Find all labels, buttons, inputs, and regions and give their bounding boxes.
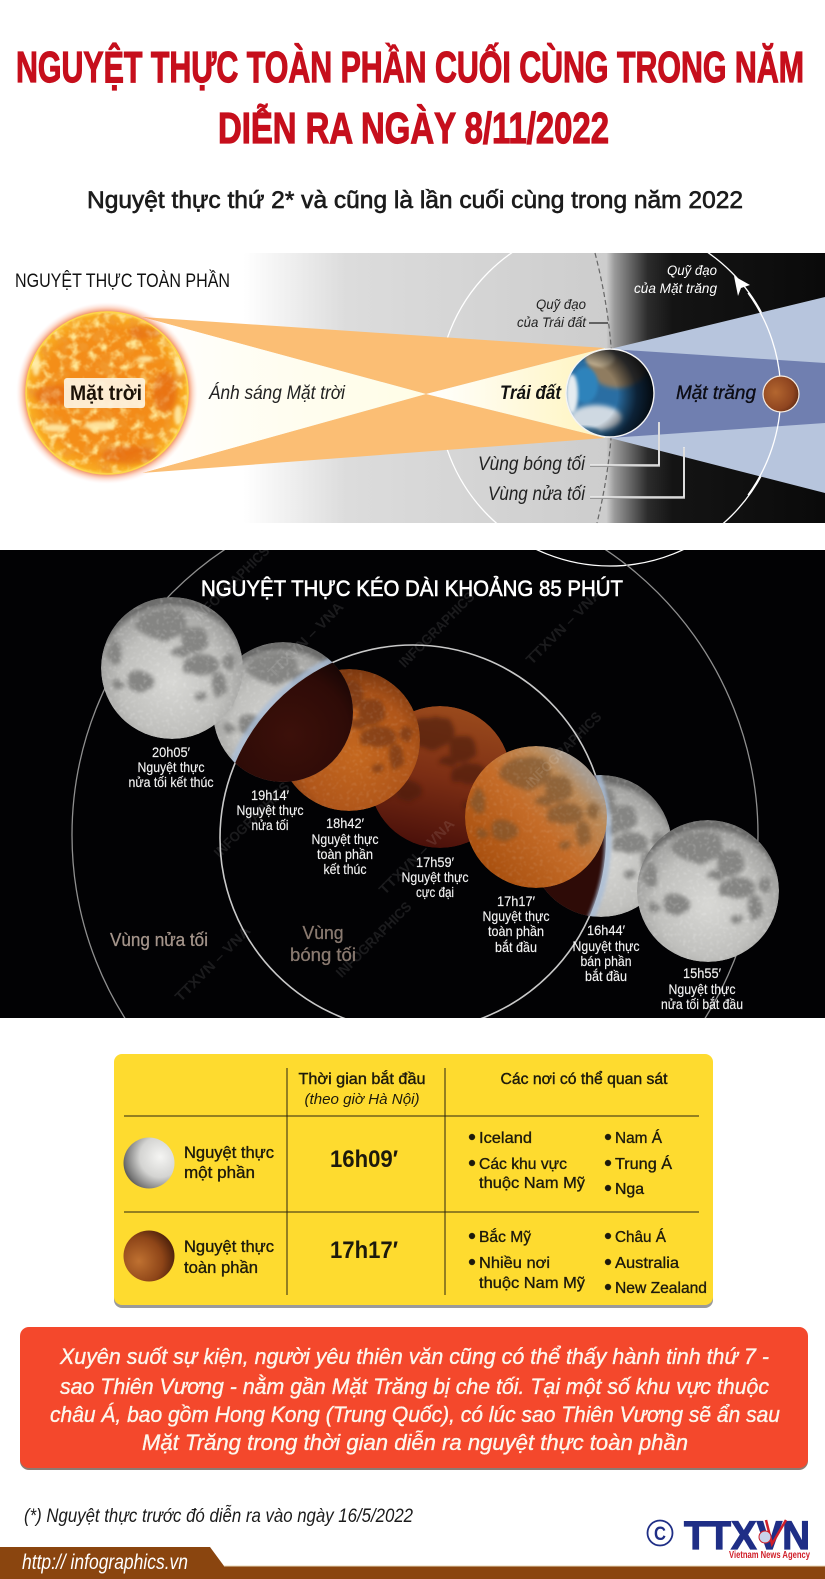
label: 19h14 [236,787,304,833]
table rules [124,1068,699,1295]
label: 15h55: 15h55′ [683,965,721,981]
callout: Uranus note: châu Á, bao gồm Hong Kong (Trung Quốc), có lúc sao Thiên Vương sẽ ẩn sau [50,1402,780,1427]
moon orbit over the shadow [748,293,781,495]
moon: 16h44 partial [544,775,670,917]
label: 17h17 [482,893,550,955]
sunlight rays [142,317,605,473]
moon: 20h05 [101,597,243,739]
icon: moon in shadow [763,376,799,412]
label: 17h59: 17h59′ [416,854,454,870]
label: umbra with leader: Vùng bóng tối [478,454,586,475]
label: 20h05 [128,744,214,790]
label: 17h17: 17h17′ [497,893,535,909]
label: penumbra with leader: Vùng nửa tối [488,484,586,505]
moon orbit arc [536,550,684,567]
earth orbit [595,253,613,523]
heading: total lunar eclipse: NGUYỆT THỰC TOÀN PHẦN [15,270,230,292]
label: 18h42 [312,815,378,877]
label: 18h42: kết thúc [324,861,366,877]
panel: eclipse timeline [0,550,825,1018]
table header: start time: (theo giờ Hà Nội) [304,1091,420,1108]
watermarks: INFOGRAPHICS [210,778,292,860]
moon: 17h59 maximum [369,706,511,848]
title [16,41,804,153]
locations: thuộc Nam Mỹ [479,1175,585,1192]
row label [184,1144,274,1182]
label: 17h59: Nguyệt thực [402,869,468,885]
moon orbit [438,253,762,523]
row label: một phần [184,1164,255,1182]
inner umbra circle [220,645,606,1031]
locations: Bắc Mỹ [479,1227,531,1246]
moon: 17h17 [465,746,607,888]
watermarks: INFOGRAPHICS [190,542,272,624]
label: moon orbit [634,262,717,296]
label: 17h59 [402,854,468,900]
icon: red moon [124,1230,174,1282]
table card [114,1056,713,1308]
watermarks [171,542,604,1004]
label: 18h42: 18h42′ [326,815,364,831]
diagram background [0,253,825,523]
row label [184,1238,274,1277]
locations [469,1128,672,1198]
label: 16h44: bắt đầu [585,968,627,984]
callout: Uranus note: Xuyên suốt sự kiện, người yêu thiên văn cũng có thể thấy hành tinh thứ 7 - [59,1344,769,1369]
panel: eclipse geometry diagram [16,252,825,524]
label: 19h14: 19h14′ [251,787,289,803]
label: 15h55 [661,965,743,1012]
label: umbra zone: bóng tối [290,945,356,965]
watermarks: TTXVN – VNA [171,922,253,1004]
logo: TTXVN: TTXVN [684,1514,810,1558]
label: penumbra with leader [488,447,684,505]
label: earth orbit [517,296,608,330]
heading: duration: NGUYỆT THỰC KÉO DÀI KHOẢNG 85 PHÚT [201,576,623,601]
locations: Nam Á [615,1128,662,1147]
outer penumbra circle [71,550,759,1018]
label: 18h42: Nguyệt thực [312,831,378,847]
label: 20h05: Nguyệt thực [138,759,204,775]
icon: grey moon [124,1138,174,1188]
row label: Nguyệt thực [184,1144,274,1162]
label: moon: Mặt trăng [676,383,756,404]
watermarks: TTXVN – VNA [264,598,346,680]
label: 17h59: cực đại [416,884,454,900]
row: partial eclipse [124,1128,672,1198]
moon: 15h55 [637,820,779,962]
watermarks: TTXVN – VNA [522,585,604,667]
label: 20h05: nửa tối kết thúc [128,774,214,790]
locations: Nga [615,1181,644,1198]
panel background [0,550,825,1018]
table header: start time [298,1071,426,1108]
row label: toàn phần [184,1259,258,1277]
label: 15h55: nửa tối bắt đầu [661,996,743,1012]
label: earth orbit: của Trái đất [517,314,587,330]
footer url: http:// infographics.vn [22,1551,188,1574]
locations: Các khu vực [479,1156,567,1173]
label: umbra zone [290,923,356,965]
label: 17h17: bắt đầu [495,939,537,955]
locations: Châu Á [615,1227,666,1246]
label: 16h44 [572,922,640,984]
locations: Nhiều nơi [479,1255,550,1272]
label: umbra zone: Vùng [302,923,344,943]
locations: Iceland [479,1130,532,1147]
row label: Nguyệt thực [184,1238,274,1256]
watermarks: INFOGRAPHICS [395,588,477,670]
label: 19h14: nửa tối [252,817,288,833]
label: 19h14: Nguyệt thực [236,802,304,818]
moon: 19h14 penumbral end with shadow [214,642,353,782]
label: 16h44: bán phần [580,953,632,969]
panel: observation table [114,1054,713,1308]
label: sun [64,378,145,408]
arrow: moon orbit direction [734,276,750,296]
label: 17h17: toàn phần [488,923,544,939]
label: 17h17: Nguyệt thực [482,908,550,924]
locations: Trung Á [615,1154,672,1173]
label: moon orbit: của Mặt trăng [634,280,717,296]
locations [469,1227,707,1297]
label: 16h44: Nguyệt thực [572,938,640,954]
table header: locations: Các nơi có thể quan sát [500,1071,668,1088]
watermarks: INFOGRAPHICS [522,708,604,790]
locations: Australia [615,1255,679,1272]
title: DIỄN RA NGÀY 8/11/2022 [218,103,609,153]
locations: New Zealand [615,1280,707,1297]
label: 18h42: toàn phần [317,846,373,862]
label: umbra with leader [478,422,659,475]
table header: start time: Thời gian bắt đầu [298,1071,426,1088]
label: 20h05: 20h05′ [152,744,190,760]
label: moon orbit: Quỹ đạo [667,262,717,278]
callout: Uranus note: Mặt Trăng trong thời gian diễn ra nguyệt thực toàn phần [142,1430,688,1455]
footnote: (*) Nguyệt thực trước đó diễn ra vào ngày 16/5/2022 [24,1506,413,1527]
start time: 17h17′ [330,1237,398,1264]
icon: earth [564,344,656,439]
label: 16h44: 16h44′ [587,922,625,938]
callout: Uranus note [20,1327,808,1470]
umbra [610,349,825,438]
label: 15h55: Nguyệt thực [668,981,736,997]
logo: TTXVN: C [654,1524,666,1545]
penumbra [610,297,825,493]
start time: 16h09′ [330,1146,398,1173]
footer band [0,1547,825,1579]
row: total eclipse [124,1227,707,1297]
label: earth orbit: Quỹ đạo [536,296,586,312]
moon: 18h42 [278,669,420,811]
subtitle: Nguyệt thực thứ 2* và cũng là lần cuối cùng trong năm 2022 [87,187,743,214]
callout: Uranus note: sao Thiên Vương - nằm gần Mặt Trăng bị che tối. Tại một số khu vực thuộc [60,1374,769,1399]
label: sun: Mặt trời [70,382,142,405]
watermarks: INFOGRAPHICS [332,898,414,980]
label: penumbra zone: Vùng nửa tối [110,930,208,950]
watermarks: TTXVN – VNA [375,815,457,897]
label: sunlight: Ánh sáng Mặt trời [208,383,346,404]
locations: thuộc Nam Mỹ [479,1275,585,1292]
icon: sun [16,302,198,484]
label: earth: Trái đất [500,383,562,404]
